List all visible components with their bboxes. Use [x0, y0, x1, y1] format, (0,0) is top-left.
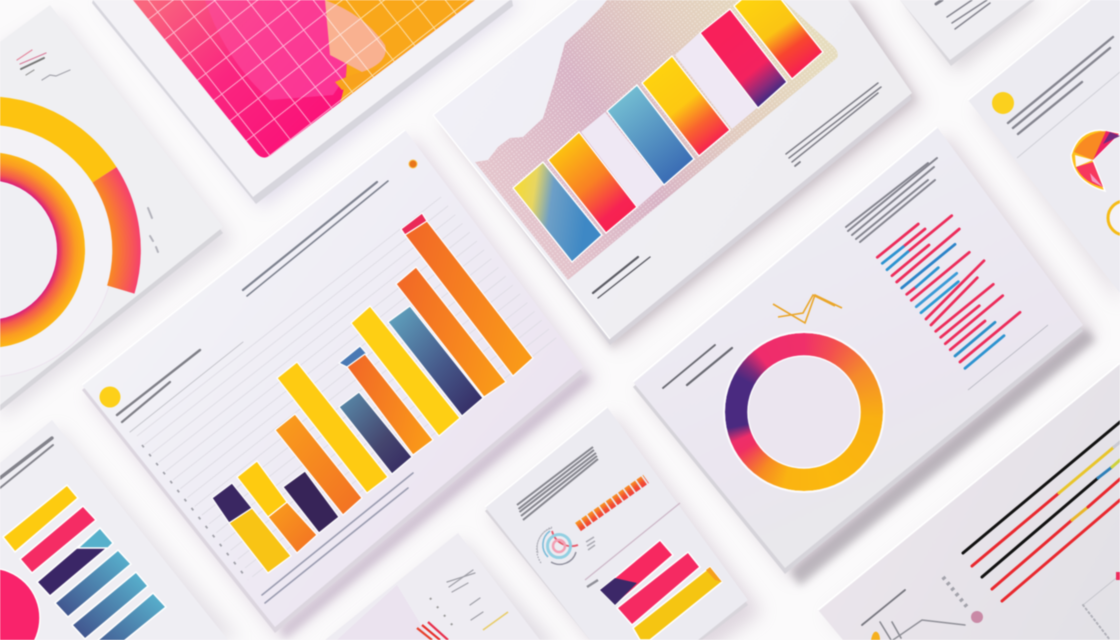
inner ring: [0, 166, 71, 334]
label dots: [430, 598, 458, 632]
card highlight: [82, 130, 405, 385]
gradient stripe 5: [700, 9, 787, 108]
small axis labels: [148, 208, 158, 252]
panel: top right small card: [900, 0, 1045, 72]
red line with yellow: [992, 520, 1072, 589]
yellow line: [483, 612, 508, 630]
red line 3: [1002, 500, 1120, 601]
outer ring segment: yellow: [0, 111, 104, 175]
text block lines: [846, 158, 937, 242]
caption lines: [936, 0, 990, 29]
bar: taller yellow: [351, 306, 460, 436]
gradient stripe 2: [548, 132, 637, 233]
outer ring segment: orange to red: [104, 175, 127, 290]
panel: bottom centre card: [485, 407, 762, 640]
teal corner: [78, 528, 113, 548]
blue stripe 2: [72, 572, 148, 639]
panel: big bar chart card: [82, 130, 596, 640]
card highlight: [485, 407, 607, 507]
panel: bottom small card: [325, 533, 560, 640]
bars: [600, 540, 722, 640]
brick row: [578, 479, 646, 527]
multi-colour line chart: [963, 422, 1120, 601]
pink bar: [617, 552, 700, 625]
bar: slate: [339, 392, 412, 474]
donut centre: [748, 356, 860, 468]
red stripe: [20, 506, 96, 573]
bar: teal slate: [388, 306, 483, 416]
donut centre: [0, 181, 56, 319]
pink blob: [971, 611, 983, 623]
bar: yellow cap: [237, 461, 287, 517]
yellow bar: [633, 567, 722, 640]
yellow red blob: [871, 632, 880, 640]
yellow badge: [992, 92, 1014, 114]
yellow ring: [1108, 201, 1120, 235]
caption lines: [447, 570, 483, 620]
red and yellow line: [972, 493, 1059, 566]
donut halo: [723, 331, 885, 493]
gridlines: [137, 197, 556, 577]
purple corner: [600, 578, 637, 605]
bar: yellow base: [229, 508, 291, 573]
bar: orange tall: [396, 267, 506, 397]
panel: bottom left card: [0, 420, 240, 640]
card highlight: [433, 0, 610, 339]
bar: orange base: [268, 502, 317, 553]
panel: upper right pie card: [968, 0, 1120, 305]
pink pie: [0, 568, 40, 640]
footer lines: [262, 473, 413, 603]
bar: blue cap: [339, 346, 367, 367]
small legend lines: [17, 50, 70, 80]
gradient stripe 4: [642, 56, 730, 156]
panel: bottom right card: [818, 363, 1120, 640]
left caption lines: [663, 345, 732, 388]
label ticks: [943, 577, 967, 607]
bar: tall yellow: [277, 362, 388, 493]
pink bar with purple corner: [600, 540, 673, 605]
red stripes: [417, 622, 448, 640]
divider: [585, 503, 680, 580]
lavender area: [337, 585, 430, 640]
pink grid chart: [132, 0, 476, 158]
gradient stripe 6: [734, 0, 823, 79]
donut ring: [725, 333, 883, 491]
black line 2: [982, 478, 1098, 577]
blue stripe 3: [90, 593, 166, 640]
tiny label: [587, 580, 598, 587]
small line chart: [773, 295, 842, 323]
bar: orange: [275, 414, 362, 515]
divider: [1017, 72, 1120, 158]
heading lines: [1008, 37, 1113, 134]
pie chart: [1071, 130, 1120, 191]
card highlight: [633, 127, 937, 382]
heading lines: [0, 438, 53, 488]
bar: dark cap: [212, 483, 252, 523]
heading lines: [117, 181, 388, 432]
caption lines: [593, 83, 881, 298]
yellow badge: [100, 386, 120, 408]
red marker: [1116, 572, 1120, 580]
panel: top stripes card: [433, 0, 925, 350]
textured area chart: [475, 0, 838, 280]
text block: [517, 447, 598, 520]
bar: tallest orange: [405, 221, 533, 376]
texture dots: [475, 0, 838, 280]
panel: left donut card: [0, 5, 233, 420]
bar: orange with cap: [347, 354, 433, 455]
light disc: [0, 123, 114, 377]
card highlight: [968, 0, 1090, 100]
purple stripe: [37, 528, 113, 596]
horizontal bar list: [877, 216, 1020, 368]
small text and mini charts: [862, 575, 1120, 640]
black line 1: [963, 422, 1120, 553]
gradient stripe 3: [607, 85, 694, 185]
yellow stripe: [3, 485, 78, 552]
orange dot: [409, 160, 417, 168]
bar group: bars: [212, 213, 533, 573]
bar: dark: [283, 471, 339, 533]
panel: pink grid card: [92, 0, 525, 208]
blue stripe 1: [55, 550, 131, 617]
bar: red cap: [401, 213, 427, 235]
gradient stripe 1: [513, 162, 602, 262]
axis ticks: [142, 445, 248, 580]
light gap panels: [581, 112, 663, 207]
card highlight: [818, 363, 1120, 610]
panel: donut card: [633, 127, 1096, 586]
thin divider: [968, 325, 1048, 390]
spiral icon: [537, 527, 578, 564]
orange corner: [706, 567, 722, 582]
stripes: [3, 485, 166, 640]
small labels: [586, 537, 595, 550]
